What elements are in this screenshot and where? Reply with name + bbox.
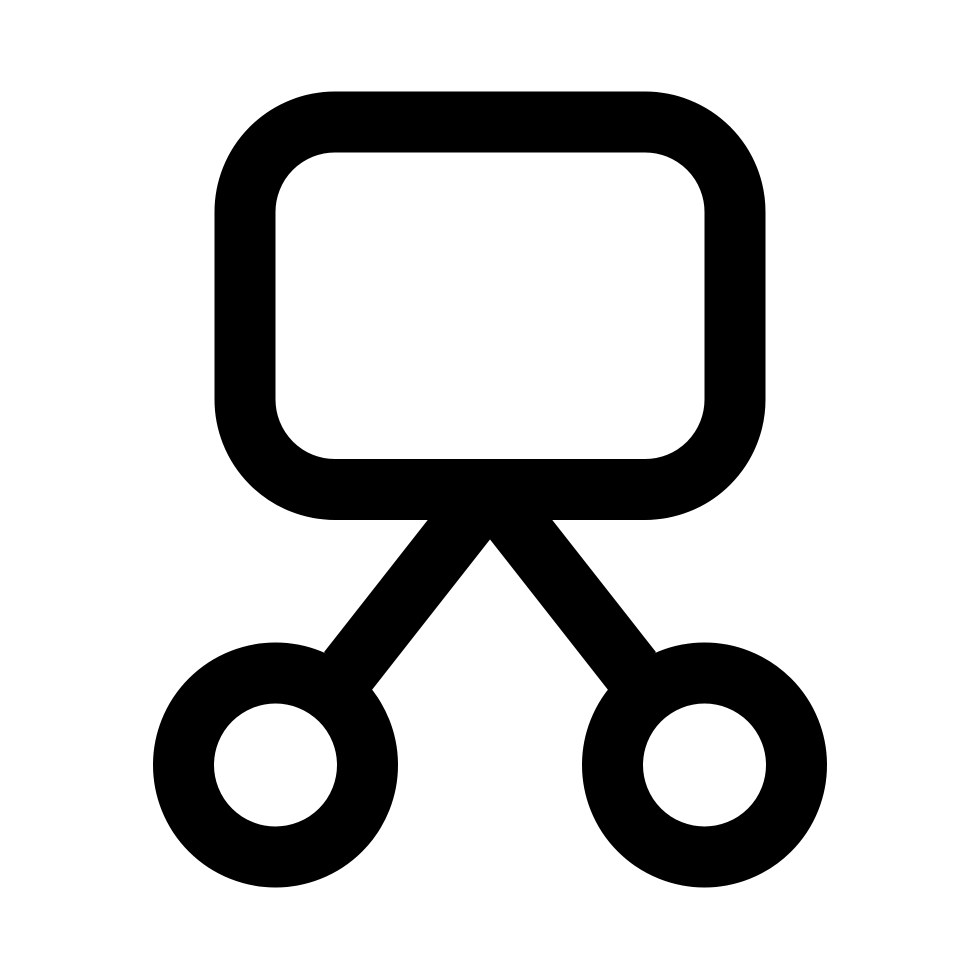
- right circle: [612, 673, 796, 857]
- rounded box: [245, 122, 735, 490]
- connector lines: [348, 490, 632, 671]
- left circle: [184, 673, 368, 857]
